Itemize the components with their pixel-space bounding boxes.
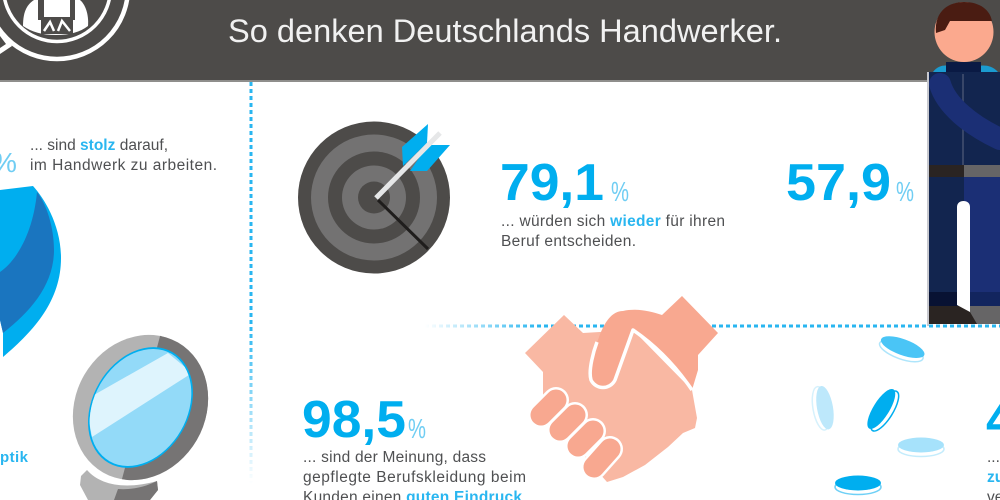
text: work clothes: gepflegte Berufskleidung beim <box>303 469 526 486</box>
panel: cut-off statistic <box>986 391 1000 500</box>
divider: horizontal dotted <box>425 324 1000 328</box>
header subtitle: So denken Deutschlands Handwerker. <box>228 13 782 49</box>
icon: target with arrow <box>298 122 450 274</box>
text: pride: ... sind stolz darauf, <box>30 137 168 154</box>
chart: blue shield pie <box>0 186 61 357</box>
illustration: craftsman in overalls <box>927 2 1000 326</box>
divider: vertical dotted <box>250 82 252 484</box>
text: work clothes: ... sind der Meinung, dass <box>303 449 486 466</box>
text: optics fragment: ptik <box>0 449 29 466</box>
icon: craftsman badge <box>0 0 128 59</box>
percent sign: 98,5: % <box>408 413 426 444</box>
text: cut-off lines: ... <box>987 449 1000 466</box>
panel: pride statistic <box>0 137 217 178</box>
text: pride: im Handwerk zu arbeiten. <box>30 157 217 174</box>
number: 57,9: 57,9 <box>786 154 891 212</box>
percent sign: 79,1: % <box>611 176 629 207</box>
number: 98,5: 98,5 <box>302 391 406 449</box>
header banner <box>0 0 1000 82</box>
panel: work clothes statistic <box>302 391 526 500</box>
text: choose again: ... würden sich wieder für ihren <box>501 213 725 230</box>
icon: coins <box>809 332 944 494</box>
percent sign: 57,9: % <box>896 176 914 207</box>
icon: handshake <box>525 296 718 482</box>
text: choose again: Beruf entscheiden. <box>501 233 636 250</box>
number: 79,1: 79,1 <box>500 154 604 212</box>
panel: choose again statistic <box>500 154 725 250</box>
icon: mirror <box>72 334 208 500</box>
